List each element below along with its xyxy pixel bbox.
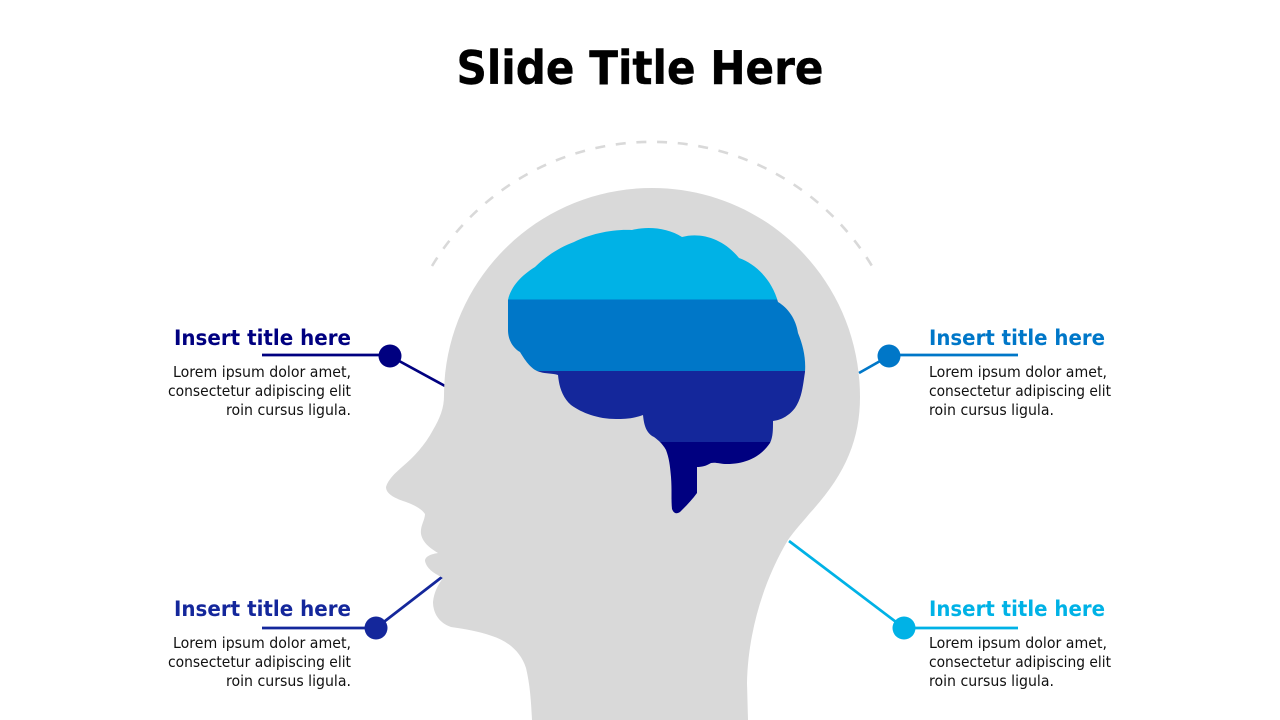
callout rule	[889, 354, 1018, 356]
callout body: Lorem ipsum dolor amet,	[173, 634, 351, 652]
title: Slide Title Here	[456, 41, 824, 95]
callout: top left	[168, 326, 402, 419]
callout body: Lorem ipsum dolor amet,	[173, 363, 351, 381]
callout: bottom right	[892, 597, 1111, 690]
callout body: consectetur adipiscing elit	[929, 382, 1111, 400]
callout rule	[904, 627, 1018, 629]
head silhouette	[386, 188, 860, 720]
callout dot	[364, 616, 388, 640]
callout heading: Insert title here	[174, 326, 351, 351]
brain band: dark blue	[537, 371, 806, 442]
callout dot	[892, 616, 916, 640]
callout body	[168, 634, 351, 690]
callout body: roin cursus ligula.	[929, 672, 1054, 690]
callout rule	[262, 627, 376, 629]
dashed arc above head	[432, 142, 872, 266]
callout body	[168, 363, 351, 419]
callout: bottom left	[168, 597, 388, 690]
callout heading: Insert title here	[929, 326, 1105, 351]
connector: top left	[390, 356, 445, 386]
callout dot	[378, 344, 402, 368]
callout body: consectetur adipiscing elit	[929, 653, 1111, 671]
connector: bottom right	[789, 541, 904, 628]
brain	[508, 228, 806, 514]
connector: top right	[859, 356, 889, 373]
brain band: mid blue	[500, 300, 815, 371]
callout body	[929, 634, 1111, 690]
callout body: roin cursus ligula.	[226, 672, 351, 690]
callout: top right	[878, 326, 1111, 419]
callout rule	[262, 354, 390, 356]
connector: bottom left	[376, 577, 442, 628]
callout heading: Insert title here	[929, 597, 1105, 622]
callout body: roin cursus ligula.	[929, 401, 1054, 419]
callout body: Lorem ipsum dolor amet,	[929, 363, 1107, 381]
callout body: consectetur adipiscing elit	[168, 382, 351, 400]
callout body: consectetur adipiscing elit	[168, 653, 351, 671]
callout body: Lorem ipsum dolor amet,	[929, 634, 1107, 652]
callout dot	[878, 344, 900, 368]
brain band: light blue	[508, 228, 778, 300]
callout body: roin cursus ligula.	[226, 401, 351, 419]
callout heading: Insert title here	[174, 597, 351, 622]
brain band: navy	[660, 442, 770, 514]
callout body	[929, 363, 1111, 419]
